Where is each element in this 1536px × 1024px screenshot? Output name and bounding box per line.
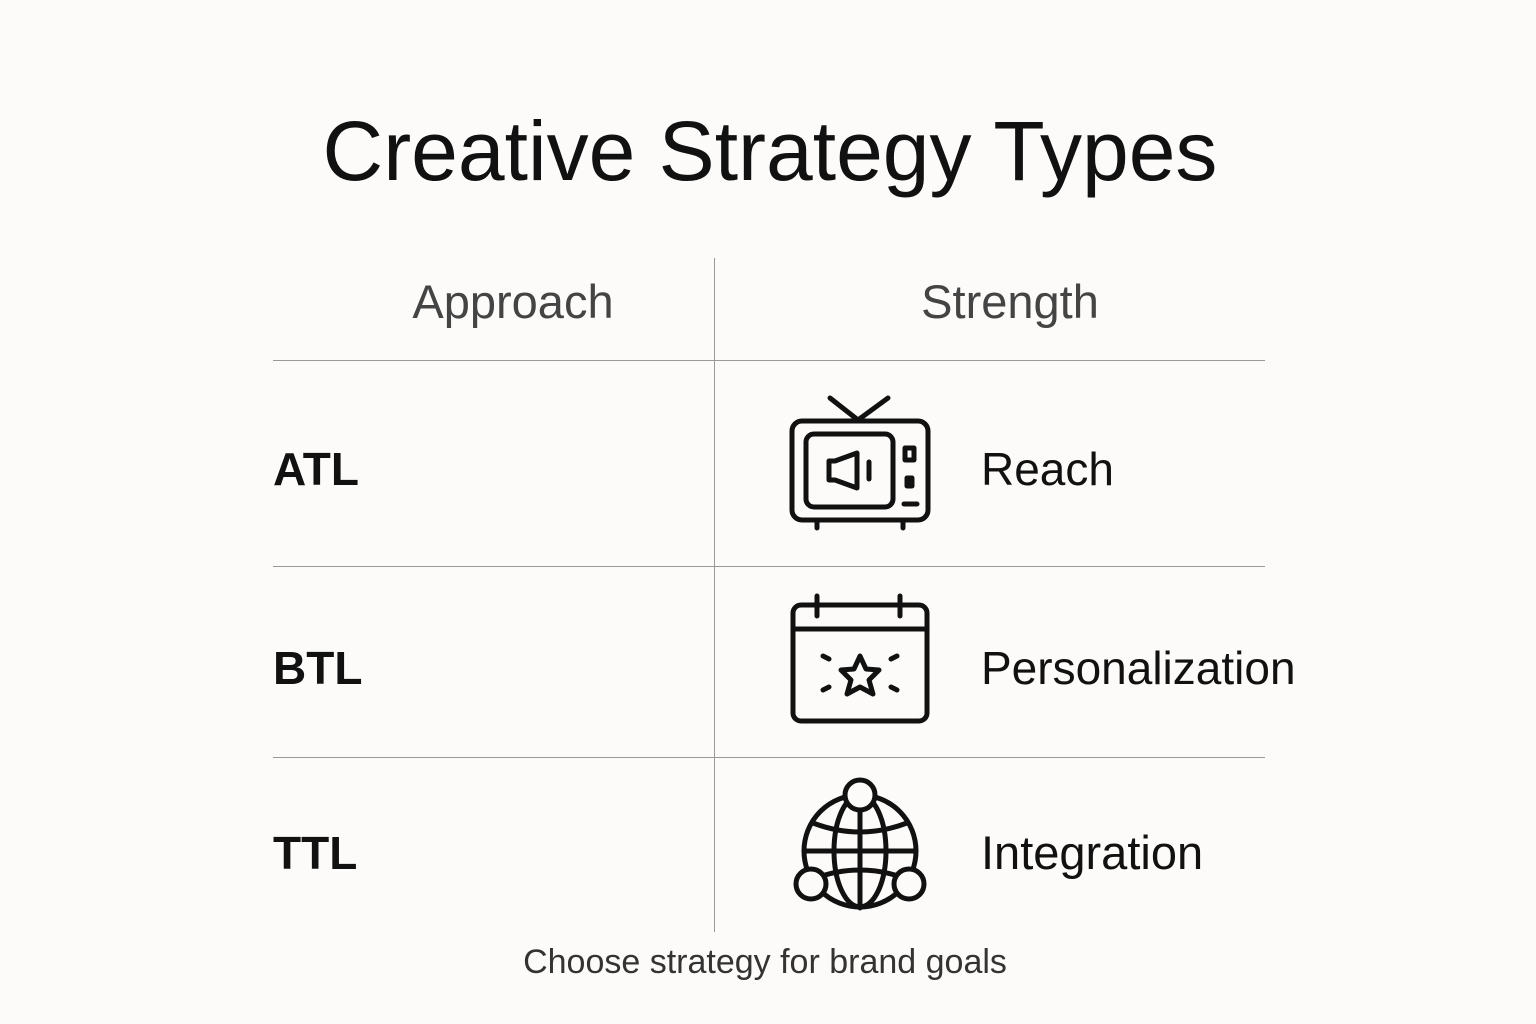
table (273, 258, 1296, 932)
row label: ATL: ATL (273, 443, 359, 495)
row label: TTL: TTL (273, 827, 357, 879)
icon: calendar (793, 596, 927, 721)
icon: globe network (796, 780, 924, 908)
header: Strength: Strength (921, 275, 1099, 328)
strength: Integration: Integration (981, 826, 1203, 879)
title: Creative Strategy Types (323, 104, 1217, 198)
strength: Reach: Reach (981, 443, 1114, 495)
strength: Personalization: Personalization (981, 642, 1296, 694)
header: Approach: Approach (412, 275, 614, 328)
footer caption: Choose strategy for brand goals (523, 943, 1007, 981)
row label: BTL: BTL (273, 642, 362, 694)
icon: TV (792, 398, 928, 528)
